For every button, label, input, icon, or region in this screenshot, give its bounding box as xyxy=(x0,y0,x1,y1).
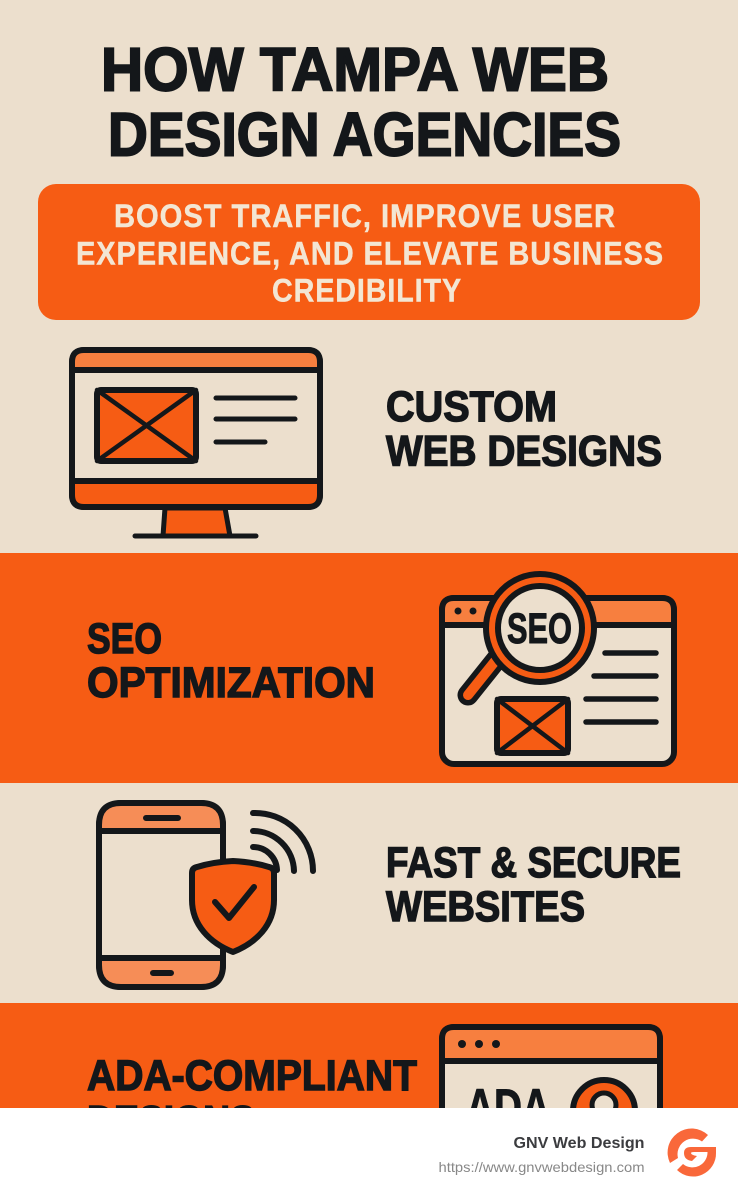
icon: logo xyxy=(668,1129,716,1176)
footer brand name: GNV Web Design xyxy=(514,1135,644,1152)
subtitle banner xyxy=(38,184,700,320)
heading: fast and secure websites xyxy=(386,839,681,931)
icon: ada browser: ADA xyxy=(466,1079,550,1135)
band: ada xyxy=(0,1003,738,1108)
heading: seo optimization: OPTIMIZATION xyxy=(87,659,375,707)
heading: ada-compliant designs: ADA-COMPLIANT xyxy=(87,1052,417,1100)
icon: desktop monitor xyxy=(72,350,320,536)
heading: seo optimization xyxy=(87,615,375,707)
icon: seo browser with magnifier xyxy=(442,574,674,764)
subtitle banner: BOOST TRAFFIC, IMPROVE USER xyxy=(114,198,616,234)
heading: custom web designs xyxy=(386,383,662,476)
heading: fast and secure websites: FAST & SECURE xyxy=(386,839,681,887)
footer xyxy=(0,1108,738,1200)
icon: phone with shield xyxy=(99,803,313,987)
title xyxy=(101,36,621,168)
footer url: https://www.gnvwebdesign.com xyxy=(438,1159,644,1175)
icon: seo browser with magnifier: SEO xyxy=(507,605,572,653)
band: seo xyxy=(0,553,738,783)
heading: seo optimization: SEO xyxy=(87,615,162,663)
subtitle banner: CREDIBILITY xyxy=(272,272,462,308)
heading: ada-compliant designs: DESIGNS xyxy=(87,1098,255,1146)
heading: custom web designs: WEB DESIGNS xyxy=(386,428,662,476)
title: HOW TAMPA WEB xyxy=(101,36,609,104)
subtitle banner: EXPERIENCE, AND ELEVATE BUSINESS xyxy=(76,236,664,272)
heading: custom web designs: CUSTOM xyxy=(386,383,557,431)
heading: fast and secure websites: WEBSITES xyxy=(386,883,585,931)
heading: ada-compliant designs xyxy=(87,1052,417,1146)
icon: ada browser xyxy=(442,1027,660,1157)
title: DESIGN AGENCIES xyxy=(108,100,621,168)
